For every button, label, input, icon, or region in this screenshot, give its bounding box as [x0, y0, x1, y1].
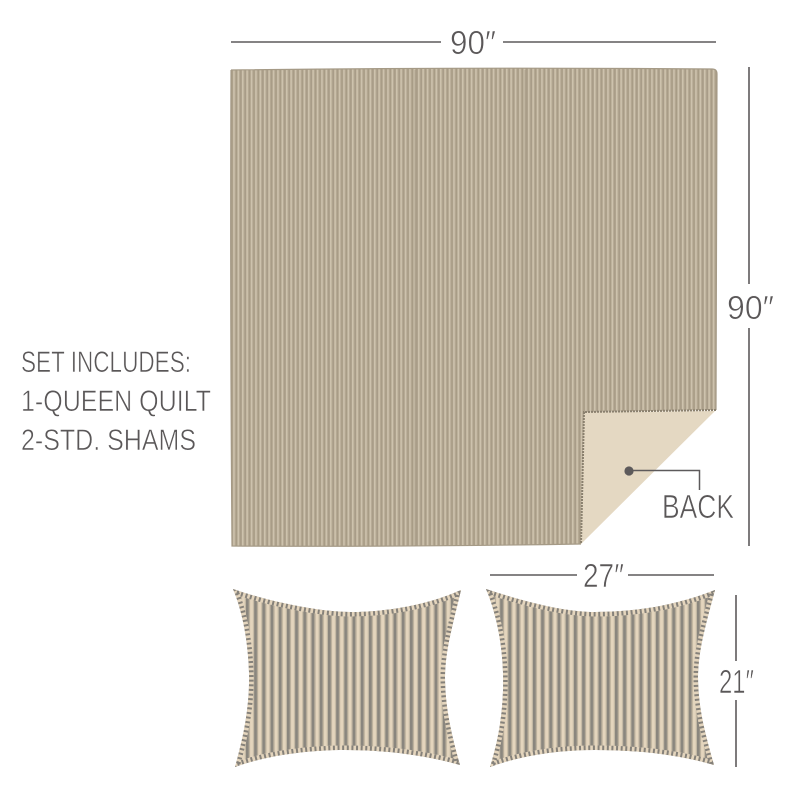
pillow sham right	[480, 585, 720, 770]
callout: back	[624, 466, 734, 525]
pillow sham left	[225, 585, 465, 770]
width dimension: quilt 90 inches: 90″	[450, 24, 496, 61]
quilt back fold	[581, 411, 715, 544]
quilt edge binding	[231, 68, 717, 546]
height dimension: sham 21 inches: 21″	[719, 663, 754, 700]
callout: back: BACK	[662, 488, 734, 525]
quilt front	[231, 68, 717, 546]
set includes text: 1-QUEEN QUILT	[21, 385, 211, 418]
set includes text: 2-STD. SHAMS	[21, 424, 196, 457]
height dimension: quilt 90 inches: 90″	[727, 289, 774, 326]
quilt with folded corner	[231, 68, 717, 546]
set includes text	[21, 346, 211, 457]
set includes text: SET INCLUDES:	[21, 346, 191, 379]
width dimension: sham 27 inches: 27″	[583, 557, 624, 594]
quilt seams	[415, 70, 525, 546]
